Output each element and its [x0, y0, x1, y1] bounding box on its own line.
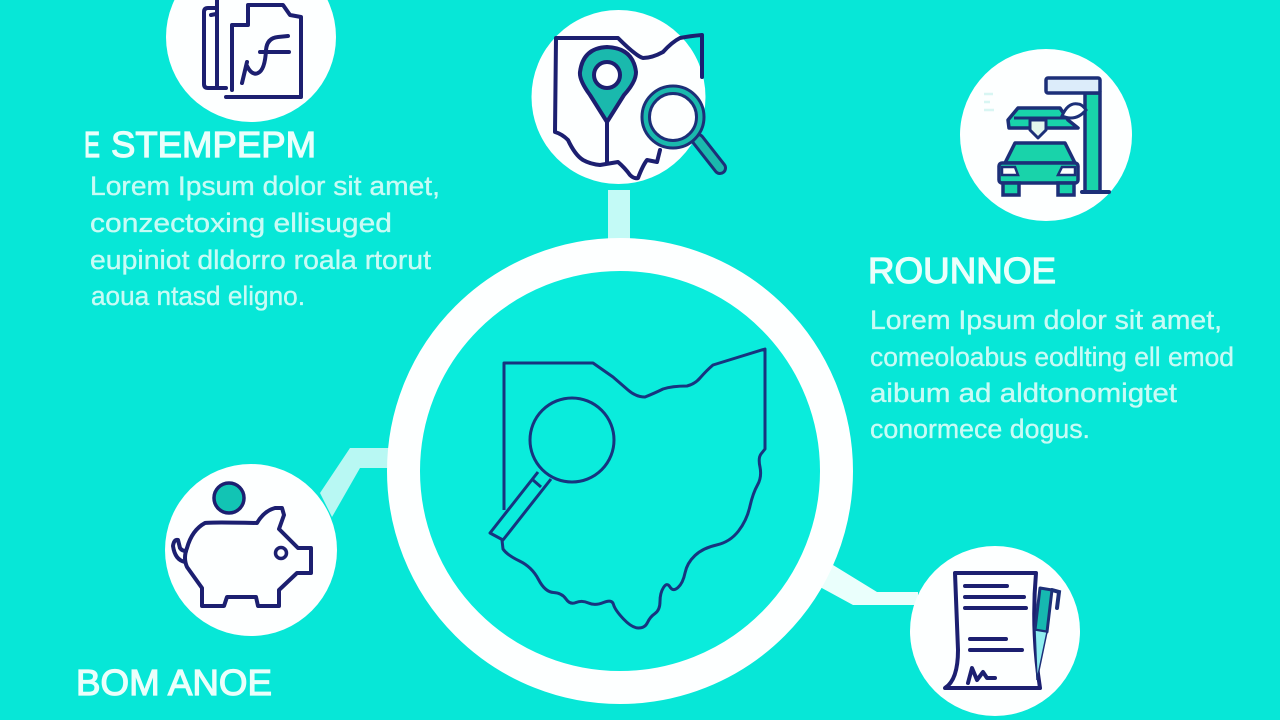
text block: right — [870, 305, 1234, 444]
heading: top left: E — [84, 124, 100, 165]
Ohio outline — [502, 349, 765, 628]
icon: signed document with pen (bottom right) — [910, 546, 1080, 716]
heading: right: ROUNNOE — [868, 250, 1056, 291]
icon: map with pin and magnifier (top centre) — [532, 10, 720, 184]
icon: piggy bank (bottom left) — [165, 464, 337, 636]
faint mark — [984, 94, 994, 110]
magnifier — [490, 398, 614, 540]
connector: top — [608, 190, 630, 245]
text block: top left: aoua ntasd eligno. — [91, 281, 305, 311]
central ring with Ohio map — [404, 254, 836, 688]
text block: top left: conzectoxing ellisuged — [90, 208, 392, 238]
text block: right: aibum ad aldtonomigtet — [870, 378, 1178, 408]
text block: top left — [90, 171, 440, 311]
text block: right: Lorem Ipsum dolor sit amet, — [870, 305, 1222, 335]
connector: left — [320, 448, 392, 517]
heading: bottom left: BOM ANOE — [76, 662, 272, 703]
icon: documents (top left) — [166, 0, 336, 122]
text block: right: conormece dogus. — [870, 414, 1090, 444]
connector: lower right — [820, 565, 918, 605]
text block: top left: Lorem Ipsum dolor sit amet, — [90, 171, 440, 201]
icon: car service (top right) — [960, 49, 1132, 221]
heading: top left: STEMPEPM — [111, 124, 316, 165]
lower car — [1005, 143, 1075, 163]
leaf — [1062, 104, 1086, 118]
lift post — [1085, 93, 1100, 192]
shield — [1030, 120, 1046, 138]
pen — [1035, 588, 1059, 680]
text block: top left: eupiniot dldorro roala rtorut — [90, 245, 432, 275]
map pin — [580, 47, 636, 163]
upper car — [1008, 108, 1078, 128]
magnifier — [642, 86, 720, 168]
text block: right: comeoloabus eodlting ell emod — [870, 342, 1234, 372]
